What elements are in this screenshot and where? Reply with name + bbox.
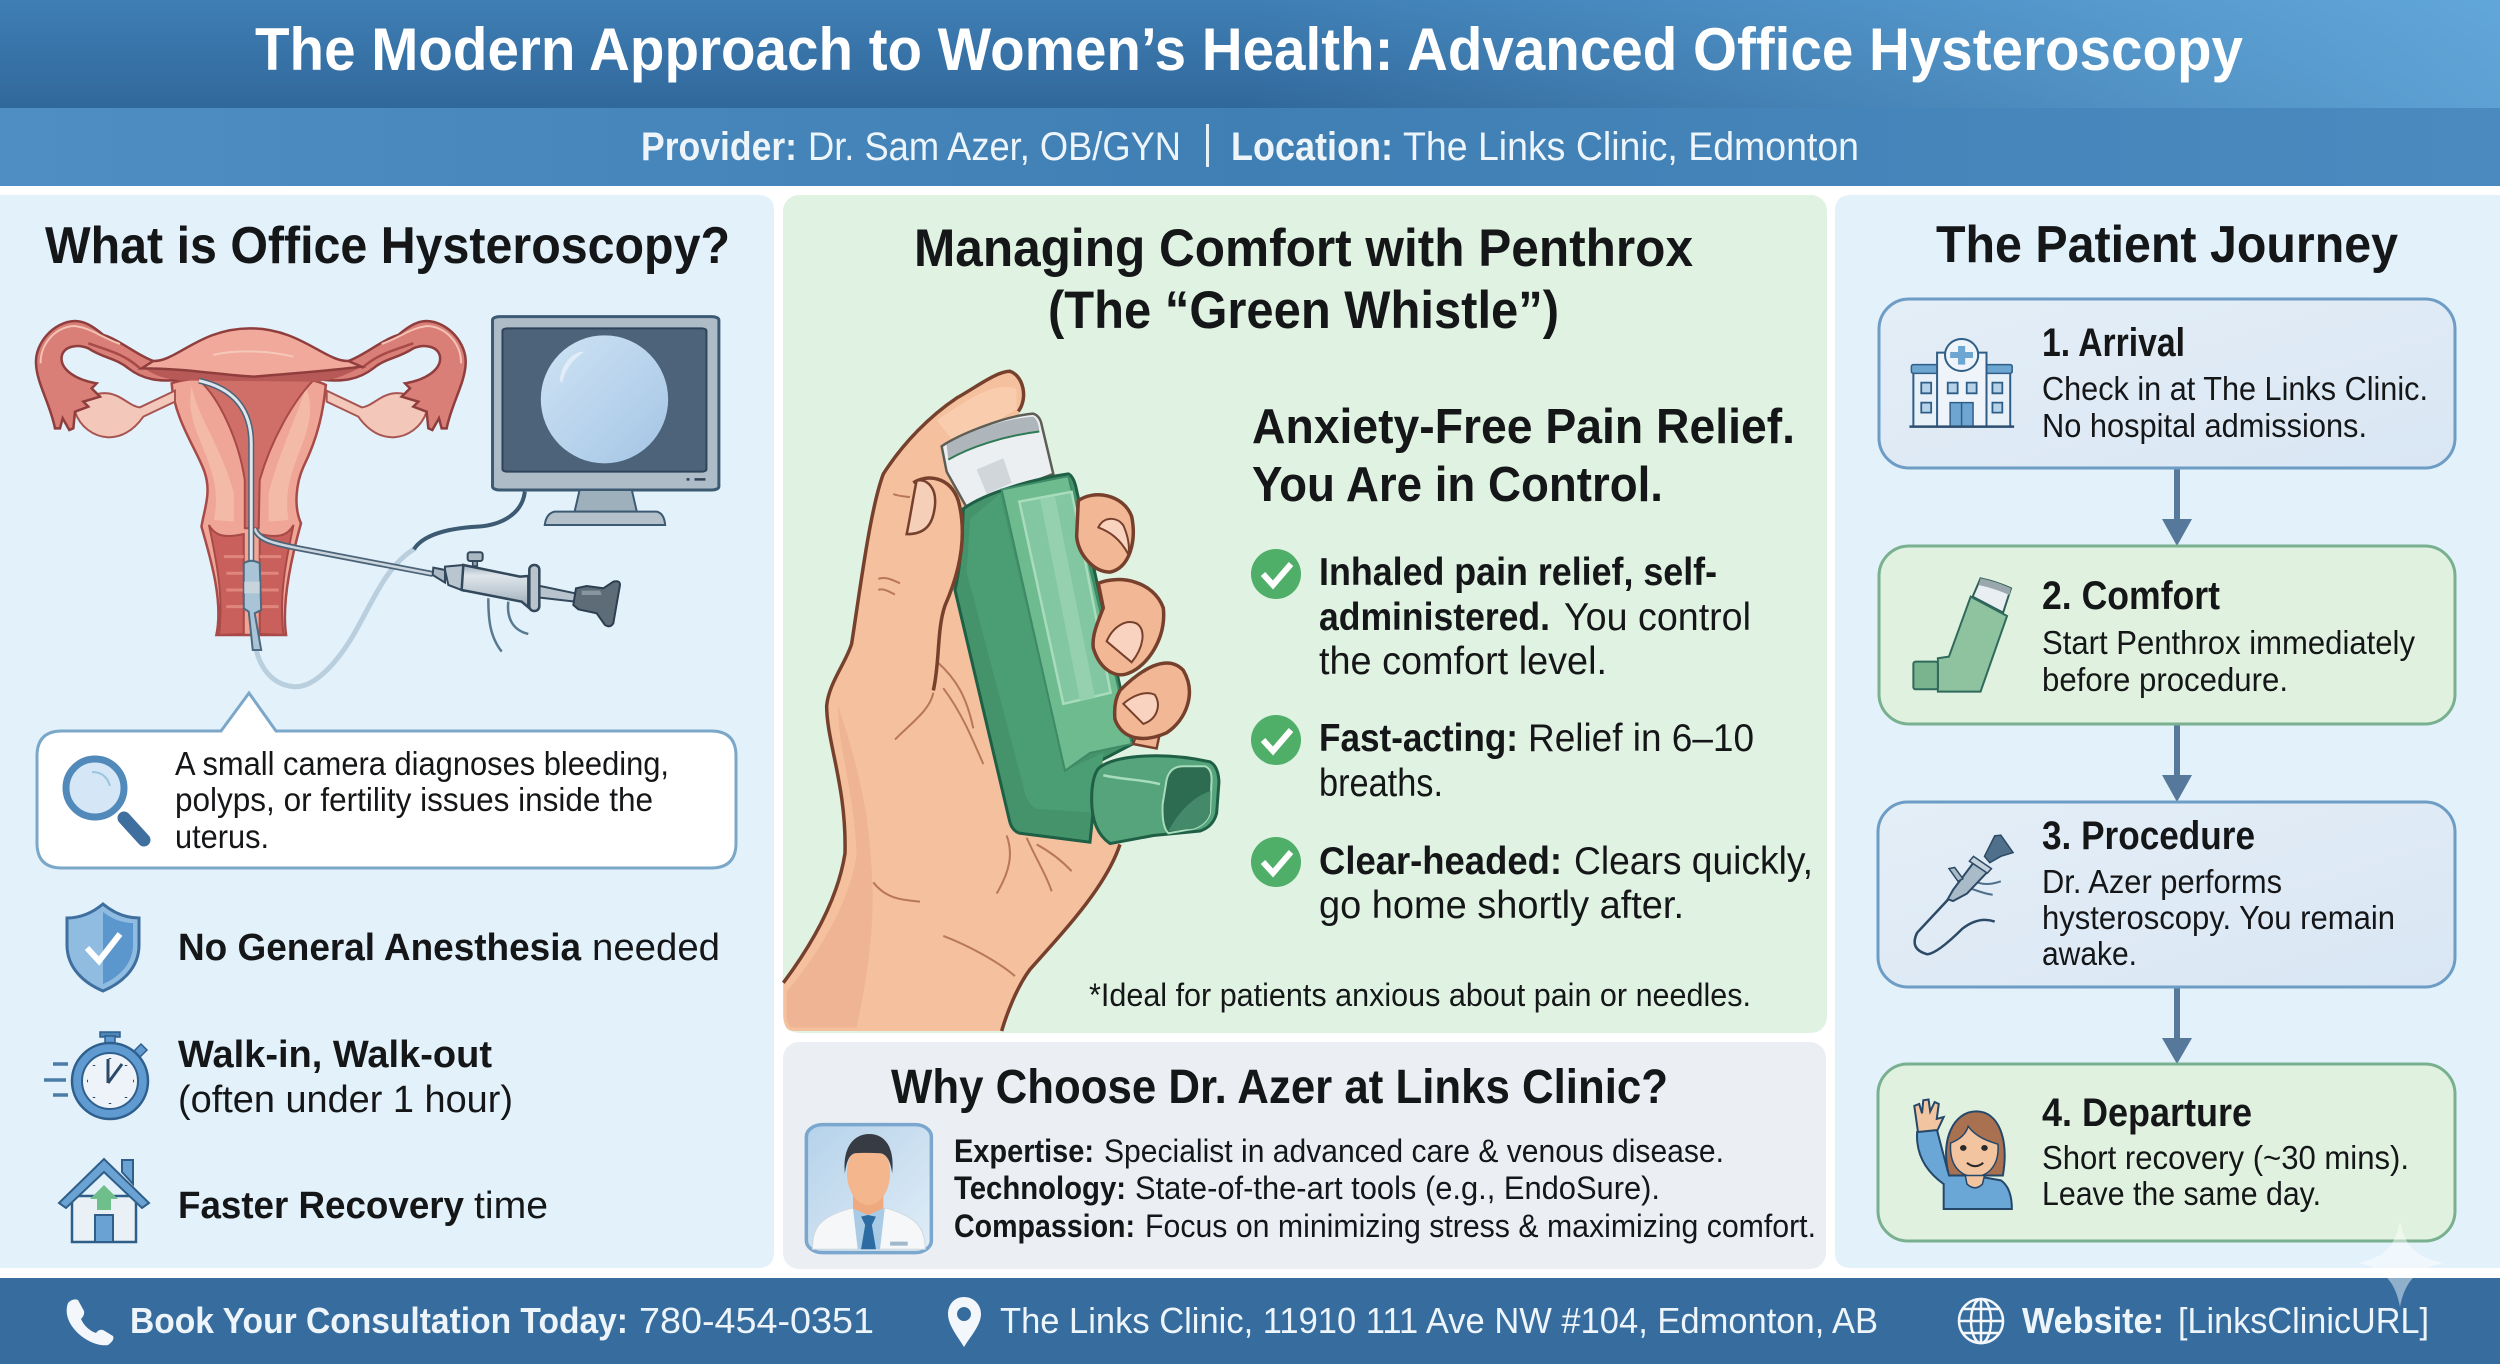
heading: What is Office Hysteroscopy? bbox=[45, 217, 730, 275]
arrow: procedure to departure bbox=[2162, 987, 2192, 1064]
heading bbox=[914, 219, 1693, 340]
point: fast-acting: breaths. bbox=[1319, 762, 1443, 805]
icon: check bbox=[1251, 837, 1301, 887]
point: clear-headed bbox=[1251, 837, 1813, 927]
heading: The Patient Journey bbox=[1936, 216, 2398, 274]
inner wire bbox=[199, 381, 251, 563]
step text: Short recovery (~30 mins). bbox=[2042, 1139, 2409, 1176]
step 1: arrival bbox=[1879, 299, 2455, 468]
step text: Dr. Azer performs bbox=[2042, 863, 2282, 900]
provider: Provider: bbox=[641, 125, 797, 169]
fundus bbox=[142, 328, 362, 377]
callout text: polyps, or fertility issues inside the bbox=[175, 781, 653, 818]
step text: Leave the same day. bbox=[2042, 1175, 2321, 1212]
benefit: walk-in, walk-out: (often under 1 hour) bbox=[178, 1079, 513, 1121]
panel: why choose dr. azer bbox=[783, 1042, 1826, 1269]
point: inhaled pain relief: You control bbox=[1564, 596, 1751, 639]
benefit: walk-in, walk-out: Walk-in, Walk-out bbox=[178, 1034, 492, 1076]
arrow: arrival to comfort bbox=[2162, 468, 2192, 546]
location: Location: bbox=[1231, 125, 1393, 169]
text: technology: State-of-the-art tools (e.g., EndoSure). bbox=[1135, 1170, 1660, 1206]
heading: Why Choose Dr. Azer at Links Clinic? bbox=[891, 1061, 1668, 1114]
icon: waving patient bbox=[1914, 1100, 2012, 1209]
step text: awake. bbox=[2042, 935, 2137, 972]
panel: the patient journey bbox=[1835, 195, 2500, 1268]
text: compassion: Compassion: bbox=[954, 1208, 1135, 1244]
uterine body bbox=[172, 377, 326, 635]
step text: 1. Arrival bbox=[2042, 321, 2185, 365]
benefit: no general anesthesia bbox=[67, 904, 720, 991]
benefit: faster recovery bbox=[59, 1159, 548, 1242]
location bbox=[1231, 125, 1859, 169]
icon: doctor avatar bbox=[806, 1125, 931, 1253]
point: clear-headed: go home shortly after. bbox=[1319, 884, 1684, 927]
icon: stopwatch bbox=[44, 1032, 148, 1119]
thumb bbox=[863, 478, 962, 697]
panel: managing comfort with penthrox bbox=[783, 195, 1827, 1033]
middle finger bbox=[1093, 580, 1164, 675]
icon: check bbox=[1251, 549, 1301, 599]
step text bbox=[2042, 814, 2395, 972]
point: inhaled pain relief bbox=[1251, 549, 1751, 683]
icon: hospital bbox=[1909, 339, 2014, 427]
subheading bbox=[1252, 400, 1795, 512]
illustration: hand holding green inhaler bbox=[783, 371, 1219, 1031]
wall highlights bbox=[190, 387, 234, 522]
step text bbox=[2042, 1091, 2409, 1212]
provider bbox=[641, 125, 1181, 169]
step 4: departure bbox=[1878, 1064, 2455, 1241]
heading: Managing Comfort with Penthrox bbox=[914, 219, 1693, 278]
index finger bbox=[1077, 495, 1133, 572]
step text: 4. Departure bbox=[2042, 1091, 2252, 1135]
footer: address: The Links Clinic, 11910 111 Ave NW #104, Edmonton, AB bbox=[1000, 1300, 1878, 1341]
icon: hysteroscope bbox=[1915, 835, 2013, 954]
footer: phone: 780-454-0351 bbox=[639, 1300, 874, 1341]
point: fast-acting bbox=[1251, 715, 1754, 805]
footer: phone: Book Your Consultation Today: bbox=[130, 1300, 628, 1341]
icon: shield bbox=[67, 904, 139, 991]
cervix canal bbox=[209, 525, 244, 635]
point: fast-acting: Relief in 6–10 bbox=[1528, 717, 1754, 760]
right ovary and tube bbox=[325, 321, 466, 437]
heading: (The “Green Whistle”) bbox=[1048, 281, 1559, 340]
footer: website: Website: bbox=[2022, 1300, 2164, 1341]
step text: 3. Procedure bbox=[2042, 814, 2255, 858]
benefit: faster recovery: Faster Recovery bbox=[178, 1185, 464, 1227]
text: technology: Technology: bbox=[954, 1170, 1126, 1206]
callout text: A small camera diagnoses bleeding, bbox=[175, 745, 669, 782]
little finger bbox=[1133, 733, 1160, 748]
pale cable bbox=[256, 548, 415, 687]
footer bar bbox=[0, 1278, 2500, 1364]
step text: No hospital admissions. bbox=[2042, 407, 2367, 444]
left ovary and tube bbox=[36, 321, 177, 437]
dark band under fundus bbox=[143, 368, 360, 382]
text: expertise: Specialist in advanced care & venous disease. bbox=[1104, 1133, 1724, 1169]
inhaler body bbox=[955, 474, 1133, 842]
step text: 2. Comfort bbox=[2042, 574, 2220, 618]
header: title band bbox=[0, 0, 2500, 108]
point: inhaled pain relief: administered. bbox=[1319, 596, 1550, 639]
benefit: no general anesthesia: needed bbox=[592, 927, 720, 969]
rigid scope shaft bbox=[255, 528, 433, 574]
point: inhaled pain relief: Inhaled pain relief, self- bbox=[1319, 551, 1717, 594]
footer: phone bbox=[67, 1299, 874, 1345]
dark cable bbox=[414, 492, 525, 549]
callout: what the camera does bbox=[37, 693, 736, 868]
text: expertise: Expertise: bbox=[954, 1133, 1094, 1169]
footer: website: [LinksClinicURL] bbox=[2178, 1300, 2429, 1341]
step text: before procedure. bbox=[2042, 661, 2288, 698]
benefit: no general anesthesia: No General Anesthesia bbox=[178, 927, 582, 969]
subheading: You Are in Control. bbox=[1252, 458, 1663, 512]
step text bbox=[2042, 574, 2415, 698]
monitor bbox=[493, 317, 719, 525]
ring finger bbox=[1115, 663, 1189, 738]
step text: hysteroscopy. You remain bbox=[2042, 899, 2395, 936]
icon: house bbox=[59, 1159, 149, 1242]
subheading: Anxiety-Free Pain Relief. bbox=[1252, 400, 1795, 454]
decorative sparkle bbox=[2358, 1221, 2444, 1307]
callout text: uterus. bbox=[175, 818, 269, 855]
provider: Dr. Sam Azer, OB/GYN bbox=[808, 125, 1181, 169]
palm creases bbox=[873, 661, 1072, 976]
hand outline bbox=[783, 371, 1120, 1031]
point: clear-headed: Clear-headed: bbox=[1319, 840, 1562, 883]
point: fast-acting: Fast-acting: bbox=[1319, 717, 1518, 760]
title: The Modern Approach to Women’s Health: Advanced Office Hysteroscopy bbox=[255, 16, 2244, 83]
text: compassion: Focus on minimizing stress & maximizing comfort. bbox=[1145, 1208, 1816, 1244]
hand and palm fill bbox=[783, 371, 1120, 1031]
point: clear-headed: Clears quickly, bbox=[1574, 840, 1813, 883]
arrow: comfort to procedure bbox=[2162, 724, 2192, 802]
panel: what is office hysteroscopy bbox=[0, 195, 774, 1268]
icon: inhaler bbox=[1913, 578, 2011, 692]
step 2: comfort bbox=[1879, 546, 2455, 724]
icon: globe bbox=[1959, 1299, 2003, 1343]
canister bbox=[942, 414, 1053, 507]
icon: phone bbox=[67, 1299, 113, 1345]
callout text bbox=[175, 745, 669, 855]
hysteroscope handle bbox=[433, 552, 620, 652]
point: inhaled pain relief: the comfort level. bbox=[1319, 640, 1607, 683]
icon: magnifying glass bbox=[66, 759, 144, 840]
hand shading bbox=[787, 706, 873, 1027]
cavity bbox=[198, 377, 314, 528]
step text: Start Penthrox immediately bbox=[2042, 624, 2415, 661]
header: provider and location band bbox=[0, 108, 2500, 186]
step 3: procedure bbox=[1878, 802, 2455, 987]
icon: check bbox=[1251, 715, 1301, 765]
footnote: *Ideal for patients anxious about pain or needles. bbox=[1089, 977, 1751, 1013]
step text bbox=[2042, 321, 2428, 444]
location: The Links Clinic, Edmonton bbox=[1403, 125, 1859, 169]
step text: Check in at The Links Clinic. bbox=[2042, 370, 2428, 407]
icon: location pin bbox=[948, 1297, 981, 1347]
mouthpiece bbox=[1092, 756, 1219, 844]
sheath bbox=[244, 561, 261, 650]
illustration: uterus with hysteroscope and monitor bbox=[36, 317, 719, 687]
benefit: walk-in, walk-out bbox=[44, 1032, 513, 1121]
upper anatomy: fundus, tubes, ovaries bbox=[36, 321, 466, 437]
footer: website bbox=[1959, 1299, 2429, 1343]
benefit: faster recovery: time bbox=[474, 1185, 548, 1227]
